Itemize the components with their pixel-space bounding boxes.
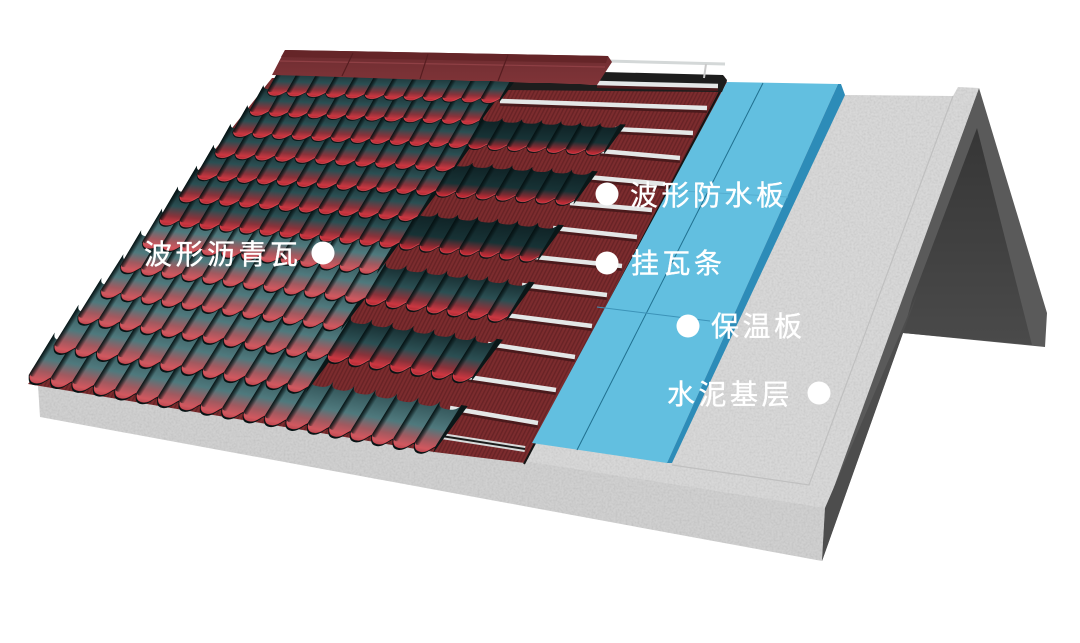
corrugated waterproof board <box>28 76 727 464</box>
tile battens <box>435 83 718 449</box>
ridge support and black strip <box>505 61 727 92</box>
callout: corrugated waterproof board: 波形防水板 <box>630 180 788 211</box>
callout: corrugated asphalt tile: 波形沥青瓦 <box>144 239 302 270</box>
concrete gable end <box>822 88 1047 561</box>
concrete base slab <box>38 87 979 561</box>
callout: tile batten: 挂瓦条 <box>631 248 726 279</box>
corrugated asphalt tile rows <box>24 68 626 457</box>
blue insulation board <box>532 82 845 463</box>
callout: cement base layer: 水泥基层 <box>667 379 793 410</box>
ridge cap tiles <box>272 50 612 85</box>
callout: insulation board: 保温板 <box>711 311 806 342</box>
